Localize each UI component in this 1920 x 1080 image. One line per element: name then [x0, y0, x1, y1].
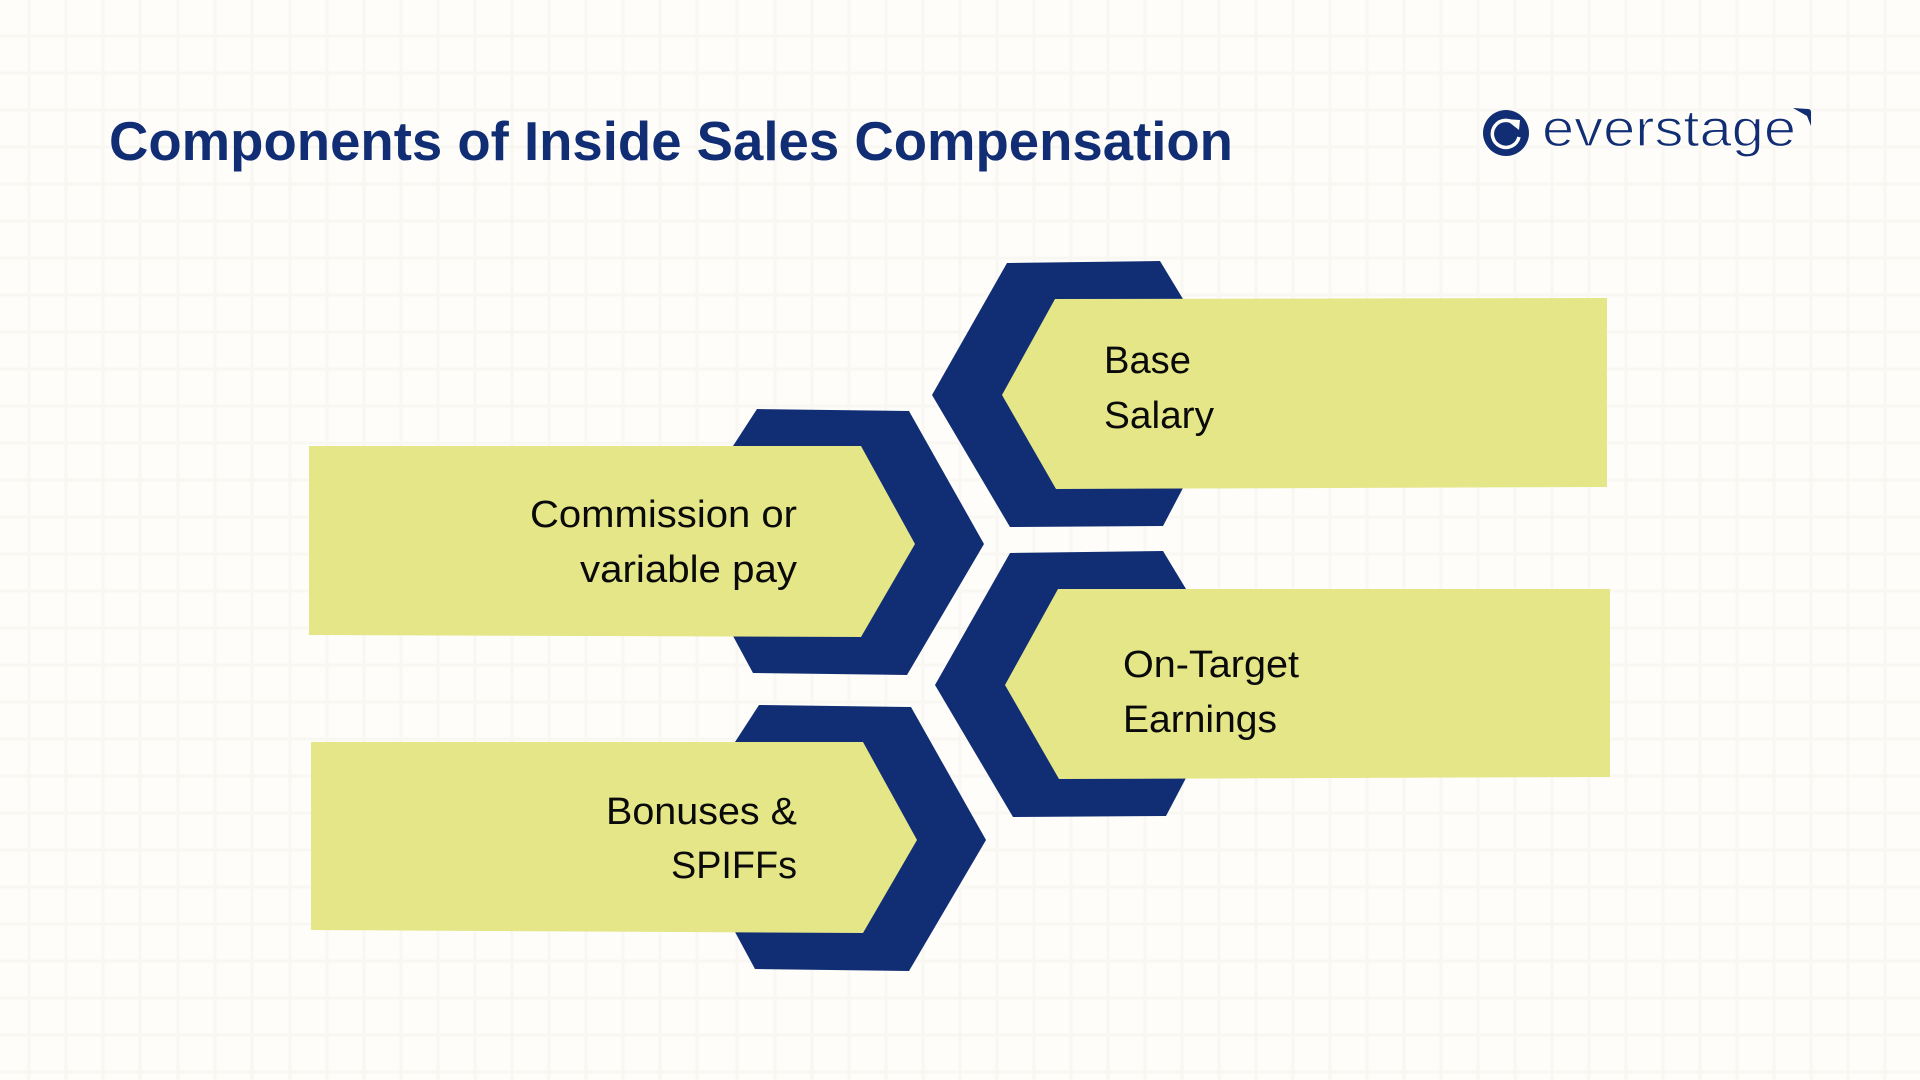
label: Bonuses & SPIFFs [606, 791, 797, 887]
panel: Bonuses & SPIFFs [311, 705, 986, 971]
panel: On-Target Earnings [935, 551, 1610, 817]
title: Components of Inside Sales Compensation [109, 110, 1233, 172]
label: On-Target Earnings: On-Target [1123, 644, 1299, 686]
label: Base Salary [1104, 340, 1214, 437]
logo wordmark: everstage [1542, 100, 1796, 158]
label: Commission or variable pay [530, 494, 797, 591]
icon: logo mark [1483, 110, 1529, 156]
label: Bonuses & SPIFFs: Bonuses & [606, 791, 797, 833]
logo: everstage [1483, 100, 1811, 158]
panel: Commission or variable pay [309, 409, 984, 675]
logo accent [1793, 108, 1811, 126]
label: On-Target Earnings: Earnings [1123, 699, 1277, 741]
label: Base Salary: Salary [1104, 395, 1214, 437]
panel: Base Salary [932, 261, 1607, 527]
label: Commission or variable pay: Commission or [530, 494, 797, 536]
label: On-Target Earnings [1123, 644, 1299, 741]
label: Base Salary: Base [1104, 340, 1191, 382]
label: Bonuses & SPIFFs: SPIFFs [671, 845, 797, 887]
label: Commission or variable pay: variable pay [580, 549, 797, 591]
